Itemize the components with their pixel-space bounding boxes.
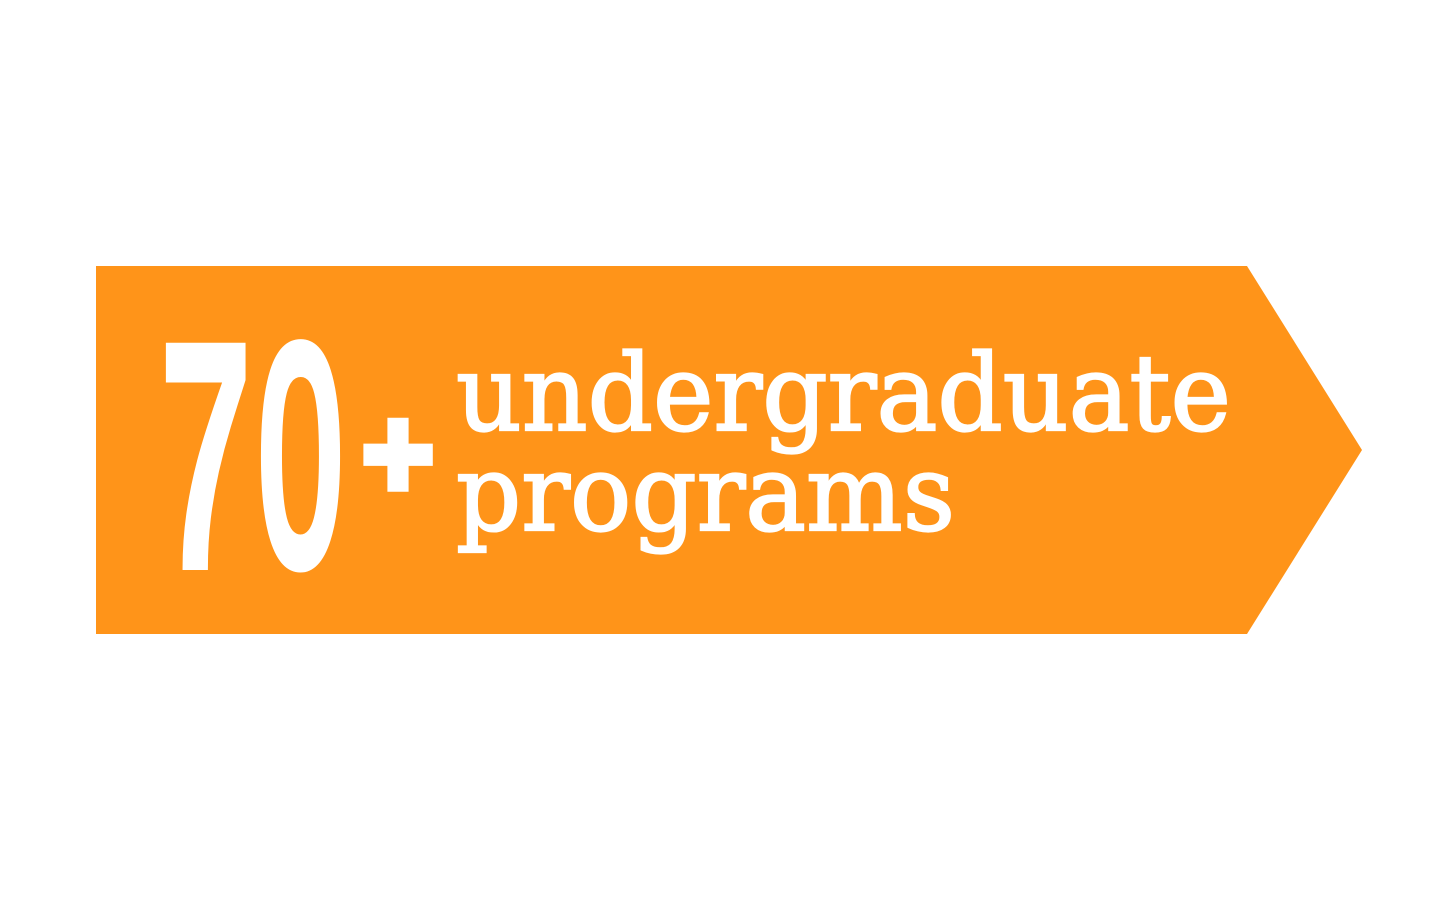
label: undergraduate: undergraduate xyxy=(456,332,1231,455)
plus sign: + xyxy=(362,380,434,526)
orange arrow panel xyxy=(96,266,1362,634)
big number 70: 7 xyxy=(160,274,252,638)
infographic: arrow banner: 0 xyxy=(259,284,342,628)
label: programs: programs xyxy=(456,432,955,555)
